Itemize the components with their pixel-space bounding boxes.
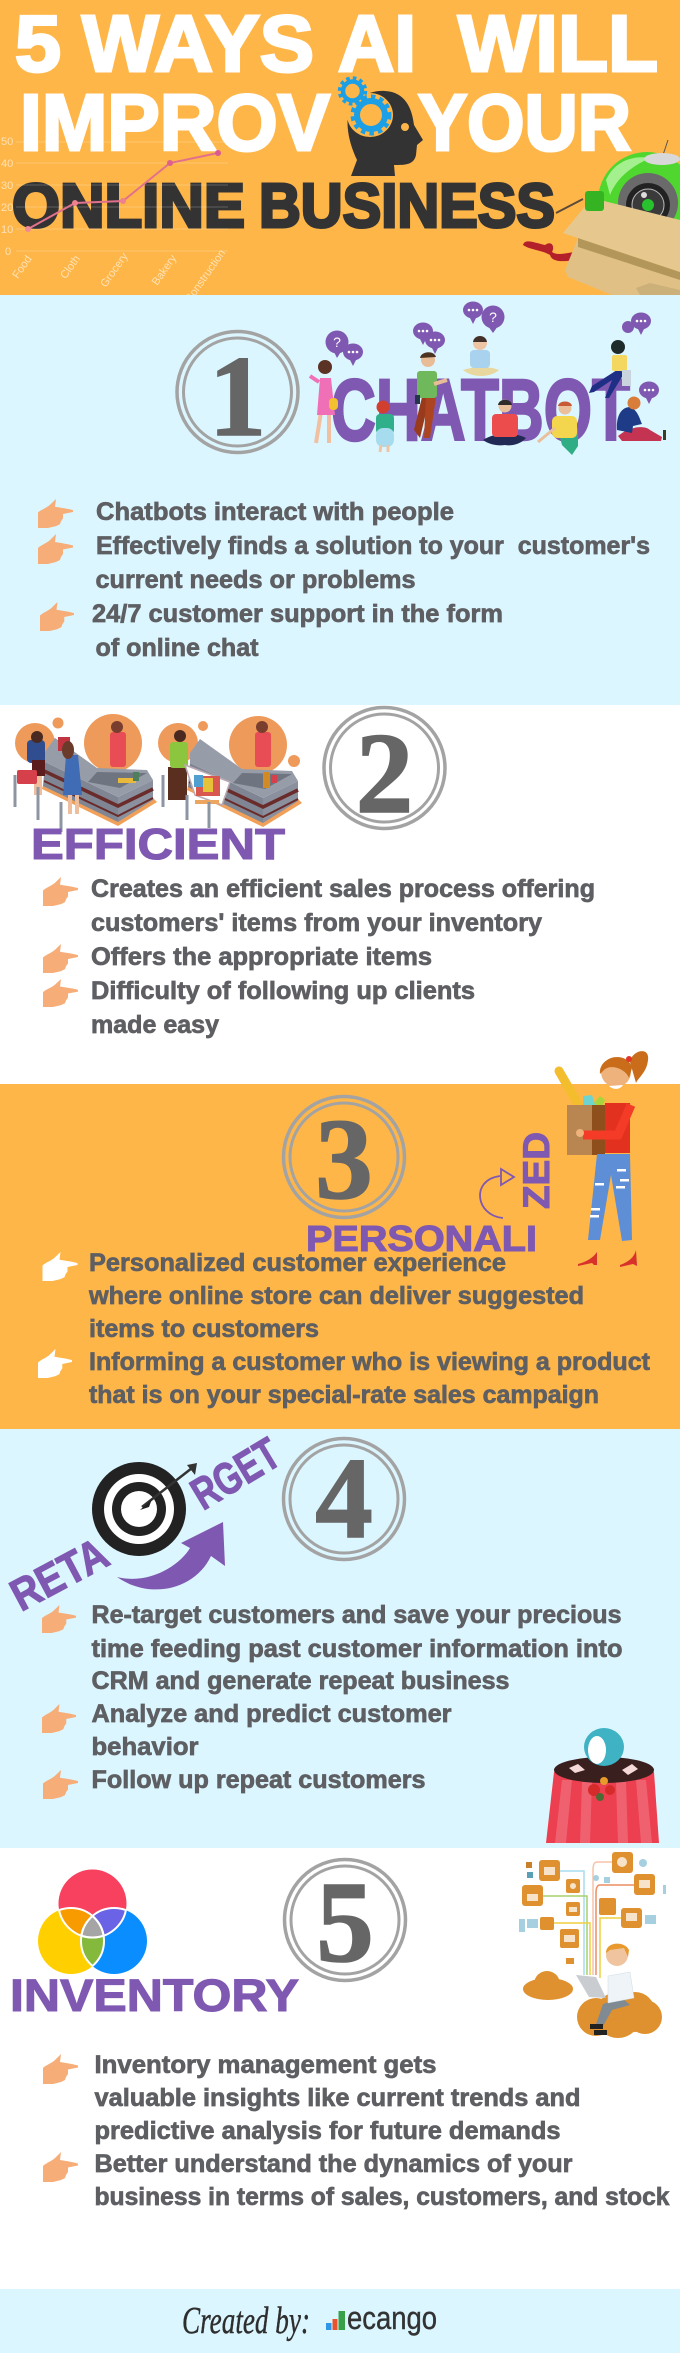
bullet text: CRM and generate repeat business xyxy=(92,1667,510,1695)
bullet text xyxy=(92,1700,452,1761)
chart: line chart: 40 xyxy=(1,158,13,170)
chart: line chart: Bakery xyxy=(150,252,180,288)
heading: efficient: EFFICIENT xyxy=(31,820,285,869)
bullet icon xyxy=(42,1704,76,1733)
chart: line chart: 50 xyxy=(1,136,13,148)
bullet text xyxy=(89,1348,651,1409)
chart: line chart: 0 xyxy=(5,246,11,258)
bullet icon xyxy=(43,1770,78,1799)
bullet text: made easy xyxy=(91,1011,219,1039)
bullet icon xyxy=(43,944,78,973)
heading: inventory: INVENTORY xyxy=(10,1970,299,2021)
bullet icon xyxy=(43,979,78,1007)
chart: line chart: 10 xyxy=(1,224,13,236)
title: online business: ONLINE xyxy=(12,172,245,241)
chart: line chart: 30 xyxy=(1,180,13,192)
footer: created by: Created by: xyxy=(182,2300,310,2342)
bullet text xyxy=(91,977,475,1039)
bullet text: Effectively finds a solution to your customer's xyxy=(96,532,650,560)
bullet text xyxy=(94,2051,580,2145)
title: 5 ways AI will xyxy=(15,0,658,88)
title: online business: BUSINESS xyxy=(259,172,555,241)
customer with cart xyxy=(168,730,230,805)
illustration: people with speech bubbles: ? xyxy=(333,334,341,350)
bullet icon xyxy=(43,877,78,906)
queue posts xyxy=(15,775,209,832)
number badge 1: 1 xyxy=(209,333,266,460)
illustration: people with speech bubbles xyxy=(310,302,666,455)
bullet text: behavior xyxy=(92,1733,199,1761)
bullet text: current needs or problems xyxy=(96,566,416,594)
man in yellow xyxy=(538,402,578,455)
bullet text: business in terms of sales, customers, and stock xyxy=(94,2183,670,2211)
bullet text xyxy=(88,1249,584,1343)
heading: reta rotated: RETA xyxy=(2,1527,117,1621)
arrow: curved purple xyxy=(480,1169,514,1218)
panel: section 2 efficient xyxy=(0,705,680,1084)
bullet text xyxy=(96,532,650,594)
chart: line chart: 20 xyxy=(1,202,13,214)
bullet text: Creates an efficient sales process offering xyxy=(91,875,595,903)
number badge 2: 2 xyxy=(356,710,413,837)
customer with basket xyxy=(17,731,45,795)
woman with red hair xyxy=(376,400,394,452)
chart: line chart: Construction xyxy=(183,248,228,305)
bullet text xyxy=(91,875,595,937)
number badge 5: 5 xyxy=(316,1859,374,1986)
bullet text: Offers the appropriate items xyxy=(91,943,432,971)
bullet text: Difficulty of following up clients xyxy=(91,977,475,1005)
bullet text: Chatbots interact with people xyxy=(96,498,454,526)
bullet text: predictive analysis for future demands xyxy=(94,2117,560,2145)
title: 5 ways AI will: WAYS xyxy=(82,0,314,88)
bullet icon xyxy=(38,499,73,528)
illustration: woman with grocery bag xyxy=(559,1051,648,1267)
bullet icon xyxy=(40,602,74,631)
number badge 4 xyxy=(284,1435,404,1562)
illustration: cloud data tree xyxy=(519,1852,666,2038)
bullet text: Better understand the dynamics of your xyxy=(94,2150,573,2178)
number badge 3 xyxy=(284,1096,404,1223)
heading: personali: PERSONALI xyxy=(306,1218,537,1259)
number badge 1 xyxy=(177,332,298,460)
bullet text: that is on your special-rate sales campaign xyxy=(89,1381,599,1409)
panel: header background xyxy=(0,0,680,295)
bullet text: Re-target customers and save your precious xyxy=(92,1601,622,1629)
panel: section 3 personalized xyxy=(0,1051,680,1429)
panel: footer xyxy=(0,2289,680,2353)
heading: zed rotated: ZED xyxy=(516,1132,557,1209)
man in red xyxy=(483,400,526,445)
number badge 3: 3 xyxy=(315,1096,373,1223)
bullet text: Inventory management gets xyxy=(94,2051,436,2079)
bullet text xyxy=(94,2150,670,2211)
bullet icon xyxy=(38,1349,72,1378)
chart: line chart: Cloth xyxy=(58,253,83,281)
bullet text: of online chat xyxy=(96,634,259,662)
bullet icon xyxy=(42,1252,78,1281)
panel: section 1 chatbot xyxy=(0,295,680,705)
icon: venn diagram xyxy=(38,1870,147,1974)
woman in pink xyxy=(310,360,338,443)
bullet text: Analyze and predict customer xyxy=(92,1700,452,1728)
illustration: checkout counters xyxy=(15,714,302,832)
man in blue hoodie xyxy=(617,396,666,441)
bullet text: items to customers xyxy=(89,1315,319,1343)
title: 5 ways AI will: WILL xyxy=(458,0,658,88)
chart: line chart: Grocery xyxy=(98,250,131,290)
bullet text: valuable insights like current trends and xyxy=(94,2084,580,2112)
bullet text xyxy=(92,1601,622,1695)
icon: robot in a box xyxy=(523,140,680,295)
number badge 4: 4 xyxy=(315,1435,373,1562)
bullet text: 24/7 customer support in the form xyxy=(92,600,503,628)
title: improve your: IMPROV xyxy=(20,78,330,167)
cashier 2 xyxy=(255,721,271,767)
bullet text: Informing a customer who is viewing a product xyxy=(89,1348,651,1376)
arrow: purple curved up xyxy=(117,1522,225,1589)
cashier 1 xyxy=(110,721,126,767)
woman sitting on T xyxy=(589,340,631,398)
bullet text: time feeding past customer information into xyxy=(92,1635,622,1663)
title: 5 ways AI will: 5 xyxy=(15,0,61,88)
title: improve your xyxy=(20,78,631,167)
bullet text xyxy=(92,600,503,662)
icon: head with gears xyxy=(340,78,423,176)
man in green xyxy=(414,352,447,438)
bullet text: Personalized customer experience xyxy=(89,1249,506,1277)
person on top of letters xyxy=(463,336,499,376)
illustration: people with speech bubbles: ? xyxy=(489,309,497,325)
customer in blue dress xyxy=(62,741,82,814)
number badge 2 xyxy=(324,708,445,837)
cloud left xyxy=(523,1971,573,2000)
bullet icon xyxy=(43,2152,78,2182)
heading: rget rotated: RGET xyxy=(182,1427,289,1520)
title: online business xyxy=(12,172,555,241)
bullet text: where online store can deliver suggested xyxy=(88,1282,584,1310)
panel: section 4 retarget xyxy=(0,1427,680,1848)
logo: ecango: ecango xyxy=(347,2300,437,2336)
bullet text: Follow up repeat customers xyxy=(92,1766,426,1794)
bullet icon xyxy=(42,1605,76,1633)
bullet text: customers' items from your inventory xyxy=(91,909,542,937)
title: improve your: YOUR xyxy=(418,78,631,167)
bullet icon xyxy=(43,2054,78,2084)
chart: line chart xyxy=(1,136,228,305)
illustration: crystal ball on table xyxy=(546,1728,659,1843)
panel: section 5 inventory xyxy=(12,1852,670,2210)
title: 5 ways AI will: AI xyxy=(338,0,416,88)
icon: bullseye target xyxy=(92,1462,197,1556)
bullet icon xyxy=(38,534,73,564)
chart: line chart: Food xyxy=(10,254,35,281)
man on cloud xyxy=(576,1944,662,2038)
number badge 5 xyxy=(284,1859,406,1986)
